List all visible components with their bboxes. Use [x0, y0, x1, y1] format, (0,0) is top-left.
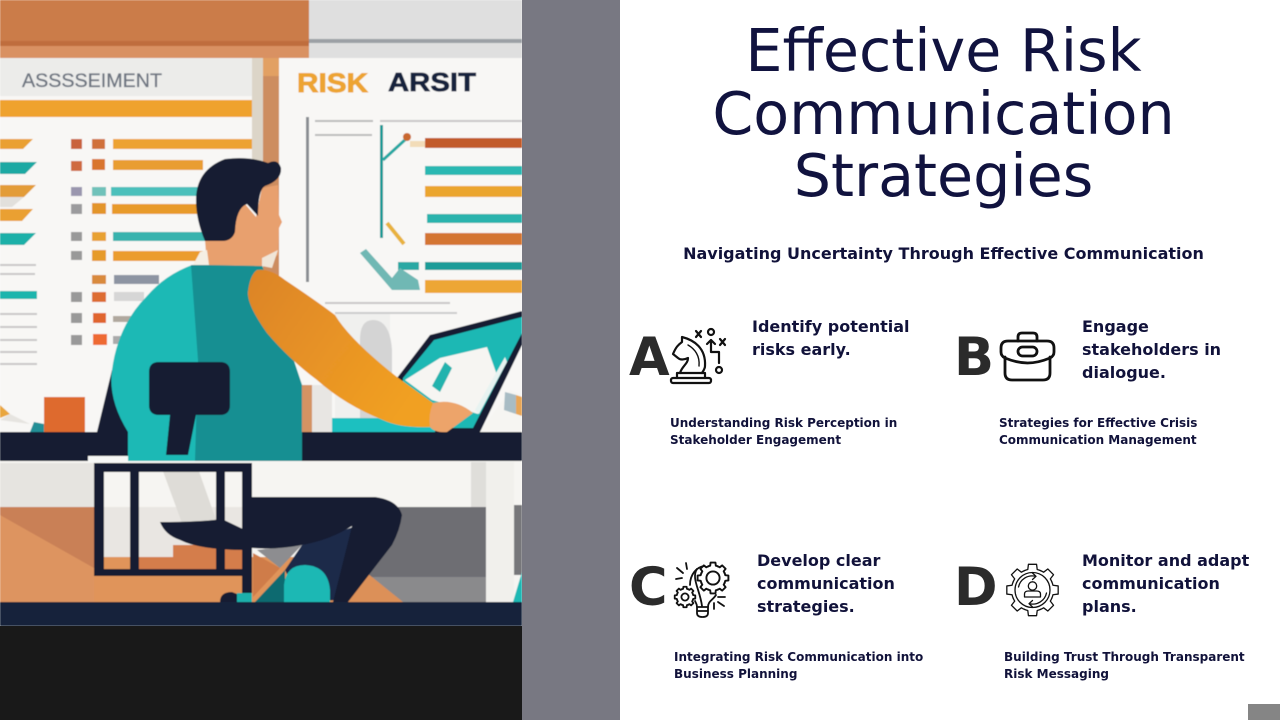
title: Effective Risk: [745, 17, 1142, 85]
item B heading: stakeholders in: [1082, 340, 1221, 359]
item A description: Understanding Risk Perception in: [670, 416, 897, 430]
under-desk area: [0, 461, 522, 602]
person legs: [160, 497, 402, 602]
item A heading: [752, 317, 910, 359]
item B description: Communication Management: [999, 433, 1197, 447]
item C description: Integrating Risk Communication into: [674, 650, 923, 664]
person: [97, 158, 473, 461]
item B heading: Engage: [1082, 317, 1149, 336]
title: Strategies: [794, 142, 1093, 210]
item C heading: Develop clear: [757, 551, 880, 570]
black footer band: [0, 626, 522, 720]
office scene: ARSIT: [388, 67, 476, 97]
corner page marker: [1248, 704, 1280, 720]
item D heading: communication: [1082, 574, 1220, 593]
item C heading: [757, 551, 895, 616]
right chart: [306, 117, 522, 432]
item C description: Business Planning: [674, 667, 797, 681]
orange box on desk: [0, 397, 85, 432]
item C heading: strategies.: [757, 597, 855, 616]
item D description: Risk Messaging: [1004, 667, 1109, 681]
shoes: [220, 565, 330, 602]
left chart: [0, 139, 252, 365]
icon: briefcase: [1000, 332, 1056, 382]
item B description: [999, 416, 1197, 447]
item C heading: communication: [757, 574, 895, 593]
floor strip: [0, 602, 522, 626]
illustration panel: [0, 0, 522, 720]
laptop: [330, 311, 522, 432]
chair back: [149, 362, 230, 455]
item D letter: D: [954, 557, 998, 618]
chair frame: [88, 456, 259, 601]
item B heading: dialogue.: [1082, 363, 1166, 382]
item B description: Strategies for Effective Crisis: [999, 416, 1197, 430]
item D heading: Monitor and adapt: [1082, 551, 1249, 570]
subtitle: Navigating Uncertainty Through Effective Communication: [683, 244, 1204, 263]
item D heading: [1082, 551, 1249, 616]
icon: chess knight strategy: [670, 328, 726, 384]
office scene: [0, 0, 522, 626]
item A heading: risks early.: [752, 340, 851, 359]
desk: [0, 432, 522, 461]
item B letter: B: [954, 327, 994, 388]
item A heading: Identify potential: [752, 317, 910, 336]
item D description: Building Trust Through Transparent: [1004, 650, 1245, 664]
icon: gear with person: [1006, 564, 1059, 616]
title: [712, 17, 1175, 210]
item A description: Stakeholder Engagement: [670, 433, 841, 447]
icon: light bulb with gears: [674, 562, 730, 618]
title: Communication: [712, 80, 1175, 148]
text on boards: ASSSSEIMENT: [22, 70, 162, 92]
item D description: [1004, 650, 1245, 681]
item D heading: plans.: [1082, 597, 1137, 616]
item A description: [670, 416, 897, 447]
item C description: [674, 650, 923, 681]
item C letter: C: [629, 557, 668, 618]
item A letter: A: [629, 327, 670, 388]
grey side bar: [522, 0, 620, 720]
background person arm shadow: [160, 463, 225, 545]
office scene: RISK: [297, 68, 369, 98]
item B heading: [1082, 317, 1221, 382]
